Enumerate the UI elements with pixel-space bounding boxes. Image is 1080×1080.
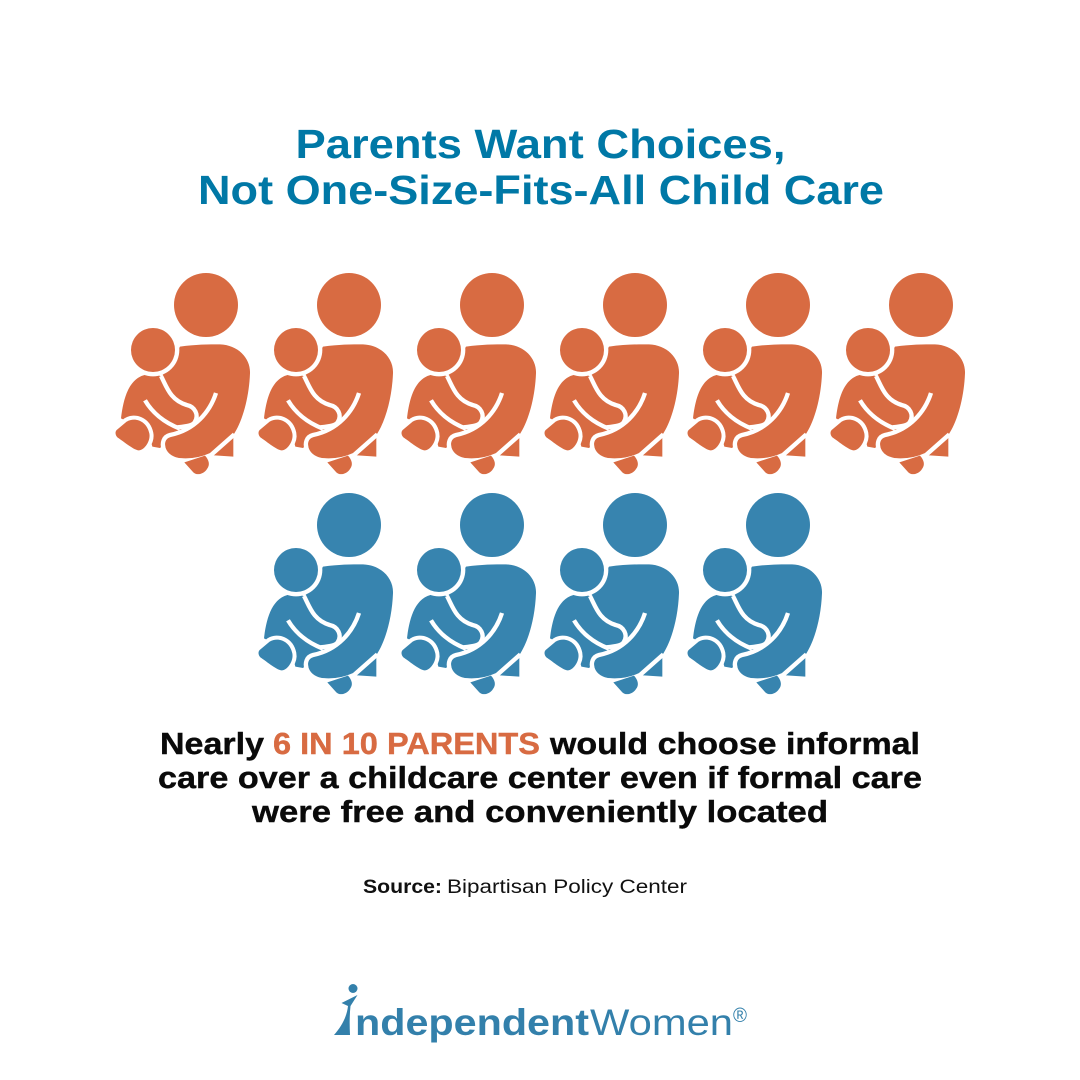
icon: orange parent 2: [259, 273, 393, 474]
statement text: [158, 726, 922, 829]
logo mark: figure i: [334, 984, 358, 1035]
icon: orange parent 1: [116, 273, 250, 474]
icon: blue parent 2: [402, 493, 536, 694]
icon: orange parent 5: [688, 273, 822, 474]
statement text: would choose informal: [549, 726, 920, 761]
statement text: were free and conveniently located: [251, 794, 828, 829]
icon: blue parent 1: [259, 493, 393, 694]
statement text: Nearly: [160, 726, 265, 761]
highlighted statistic: 6 IN 10 PARENTS: [273, 726, 540, 761]
title: [198, 121, 884, 213]
statement text: care over a childcare center even if formal care: [158, 760, 922, 795]
source line: Source:: [363, 877, 442, 898]
icon: blue parent 3: [545, 493, 679, 694]
icon: orange parent 3: [402, 273, 536, 474]
logo: Independent Women: [334, 984, 747, 1043]
icon: orange parent 4: [545, 273, 679, 474]
logo: Independent Women: ®: [733, 1005, 747, 1027]
icon row: six orange parents holding children: [116, 273, 965, 474]
source line: Bipartisan Policy Center: [447, 877, 688, 898]
icon row: four blue parents holding children: [259, 493, 822, 694]
title: Parents Want Choices,: [296, 121, 786, 167]
icon: blue parent 4: [688, 493, 822, 694]
icon: orange parent 6: [831, 273, 965, 474]
source line: [363, 877, 688, 898]
logo wordmark: ndependent: [355, 1002, 589, 1043]
logo: Independent Women: Women: [590, 1002, 733, 1043]
title: Not One-Size-Fits-All Child Care: [198, 167, 884, 213]
